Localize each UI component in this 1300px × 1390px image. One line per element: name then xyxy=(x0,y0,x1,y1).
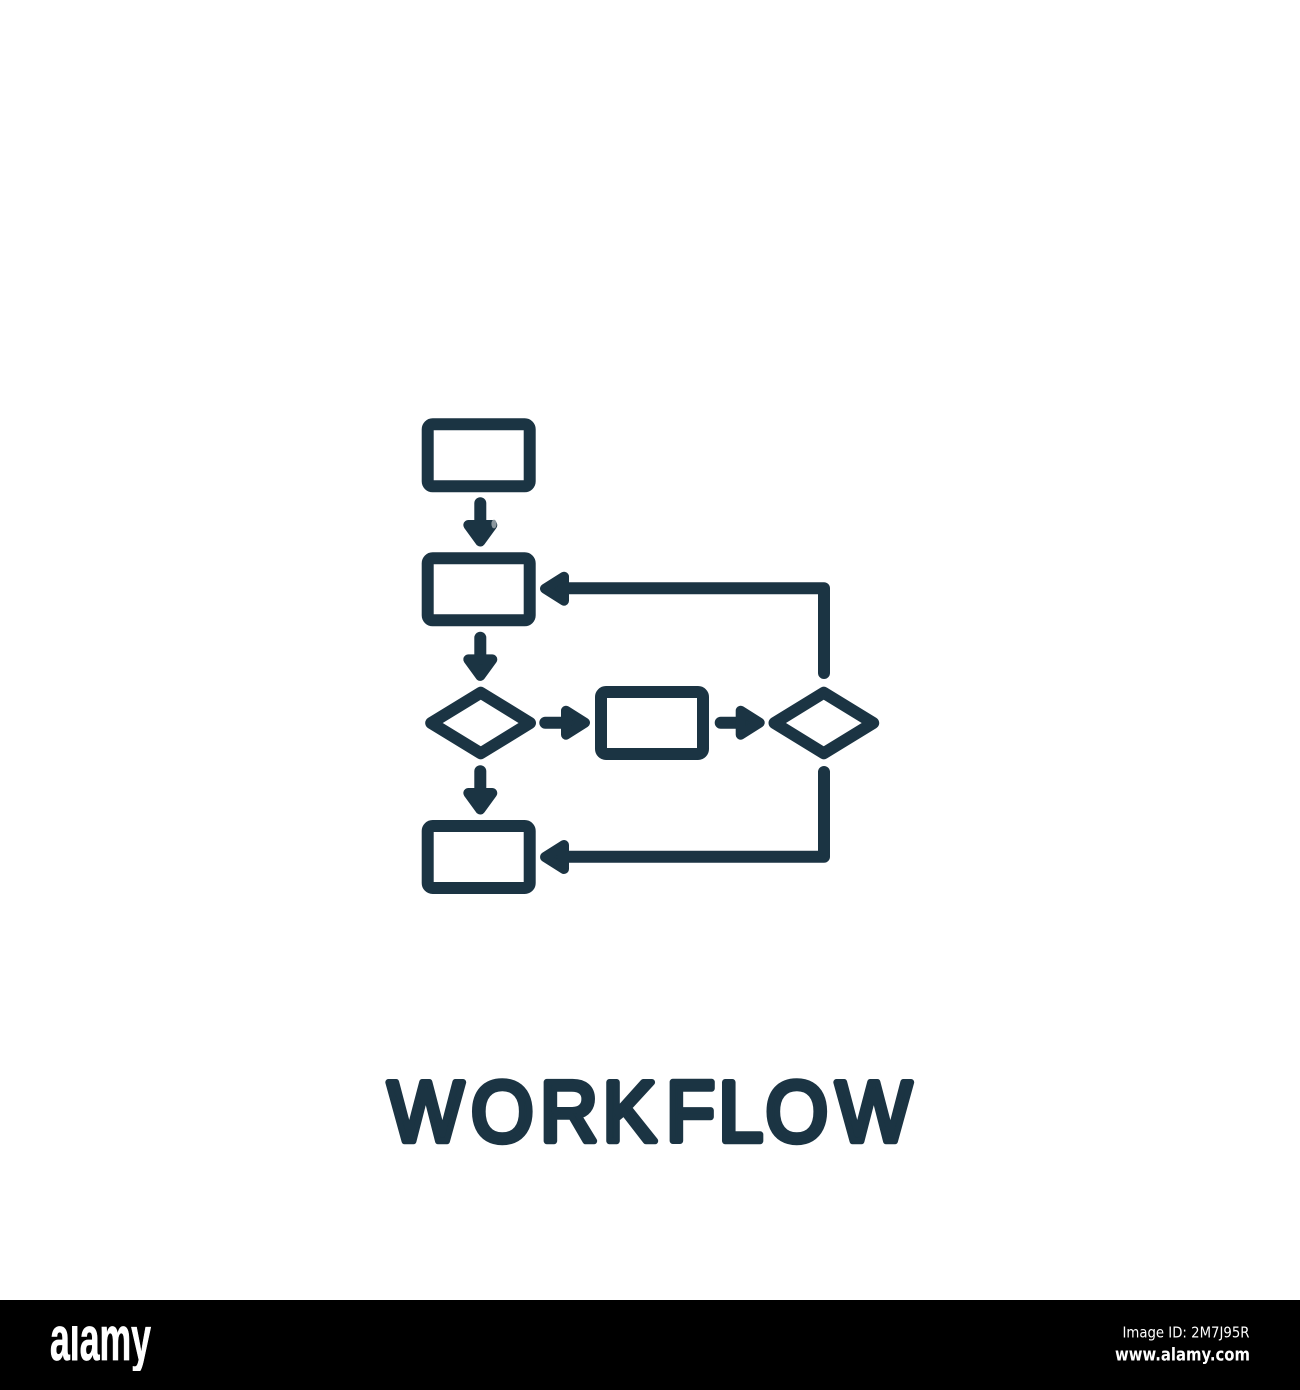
image id: Image ID: 2M7J95R xyxy=(1122,1323,1250,1341)
process box 1 xyxy=(428,424,530,486)
alamy logo: alamy xyxy=(50,1305,151,1374)
title: WORKFLOW xyxy=(388,1065,911,1160)
process box 3 xyxy=(601,692,703,754)
workflow flowchart icon xyxy=(428,424,873,888)
website url: www.alamy.com xyxy=(1115,1345,1250,1366)
footer bar xyxy=(0,1300,1300,1390)
feedback arrow: decision 2 down to box 4 xyxy=(545,772,824,869)
arrow: box 3 to decision 2 xyxy=(721,711,760,735)
feedback arrow: decision 2 up to box 2 xyxy=(545,577,824,673)
decision diamond 2 xyxy=(774,693,873,753)
process box 4 xyxy=(428,826,530,888)
arrow: decision 1 to box 3 xyxy=(545,711,585,735)
arrow: decision 1 to box 4 xyxy=(468,771,492,810)
infographic canvas xyxy=(0,418,1300,1390)
arrow: box 1 to box 2 xyxy=(468,503,497,542)
process box 2 xyxy=(428,558,530,620)
decision diamond 1 xyxy=(431,693,530,753)
arrow: box 2 to decision 1 xyxy=(468,638,492,676)
